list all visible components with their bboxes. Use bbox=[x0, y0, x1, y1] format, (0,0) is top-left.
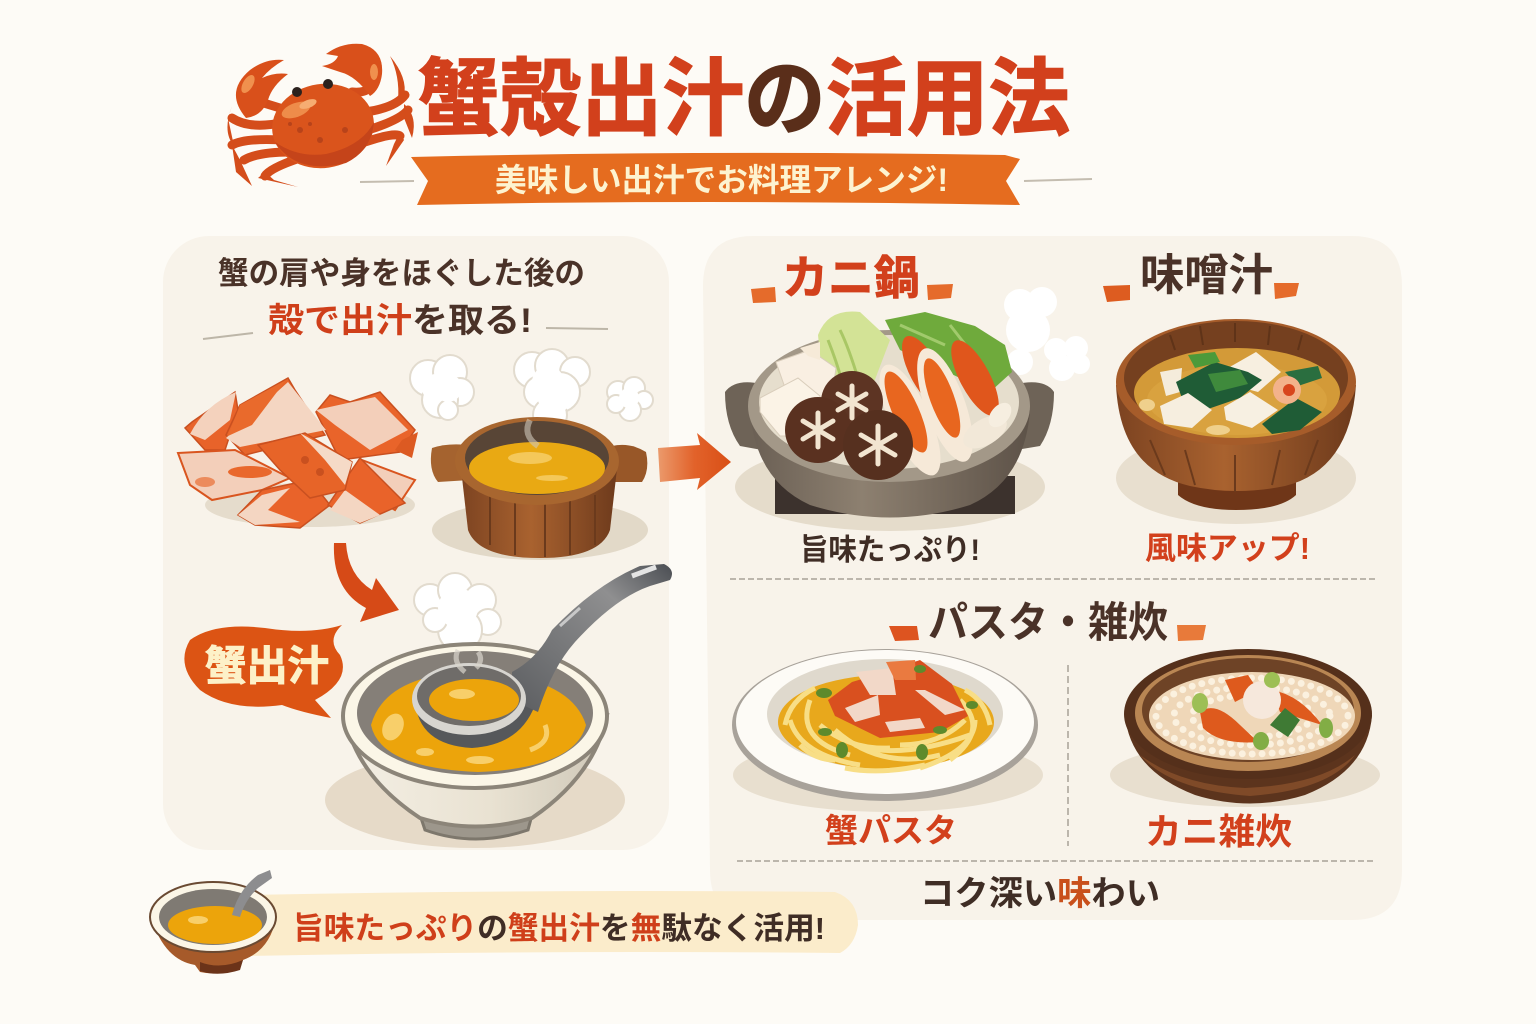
footer ribbon bbox=[250, 891, 858, 956]
heading: left panel: 殻で出汁を取る! bbox=[268, 302, 532, 340]
illustration: bowl of crab stock with ladle bbox=[325, 564, 672, 848]
arrow: curved down to bowl bbox=[334, 543, 399, 622]
illustration: crab hot pot bbox=[725, 311, 1054, 531]
heading: left panel bbox=[203, 256, 608, 340]
caption: crab zosui: カニ雑炊 bbox=[1145, 811, 1292, 852]
icon: steam clouds over pot bbox=[410, 349, 653, 432]
heading: miso soup: 味噌汁 bbox=[1140, 251, 1273, 300]
illustration: crab pasta bbox=[732, 649, 1043, 812]
title: 蟹殻出汁の活用法 bbox=[418, 52, 1070, 146]
arrow: to recipes bbox=[658, 433, 731, 490]
illustration: miso soup bowl bbox=[1116, 319, 1356, 524]
callout: crab stock bubble bbox=[184, 625, 343, 718]
panel: recipes bbox=[703, 236, 1402, 920]
footer ribbon: 旨味たっぷりの蟹出汁を無駄なく活用! bbox=[293, 911, 825, 946]
subtitle ribbon bbox=[360, 153, 1092, 205]
caption: crab pasta: 蟹パスタ bbox=[825, 812, 957, 849]
heading: left panel: 蟹の肩や身をほぐした後の bbox=[218, 256, 585, 291]
heading: miso soup bbox=[1103, 251, 1299, 302]
illustration: crab shells bbox=[178, 378, 418, 528]
panel: making stock bbox=[163, 236, 669, 850]
callout: crab stock bubble: 蟹出汁 bbox=[205, 643, 329, 689]
icon: small bowl of stock bbox=[150, 870, 276, 974]
heading: kani nabe bbox=[751, 252, 953, 304]
icon: steam over hot pot bbox=[1004, 287, 1090, 381]
caption: hot pot: 旨味たっぷり! bbox=[800, 534, 980, 567]
illustration: crab zosui bowl bbox=[1110, 649, 1380, 807]
heading: kani nabe: カニ鍋 bbox=[782, 252, 920, 304]
caption: rich flavour: コク深い味わい bbox=[920, 875, 1160, 913]
icon: steam over bowl bbox=[414, 573, 501, 652]
subtitle ribbon: 美味しい出汁でお料理アレンジ! bbox=[495, 162, 948, 198]
caption: miso: 風味アップ! bbox=[1145, 531, 1310, 566]
heading: pasta and zosui: パスタ・雑炊 bbox=[928, 599, 1168, 646]
illustration: clay pot with stock bbox=[431, 417, 648, 560]
icon: crab bbox=[227, 44, 414, 187]
